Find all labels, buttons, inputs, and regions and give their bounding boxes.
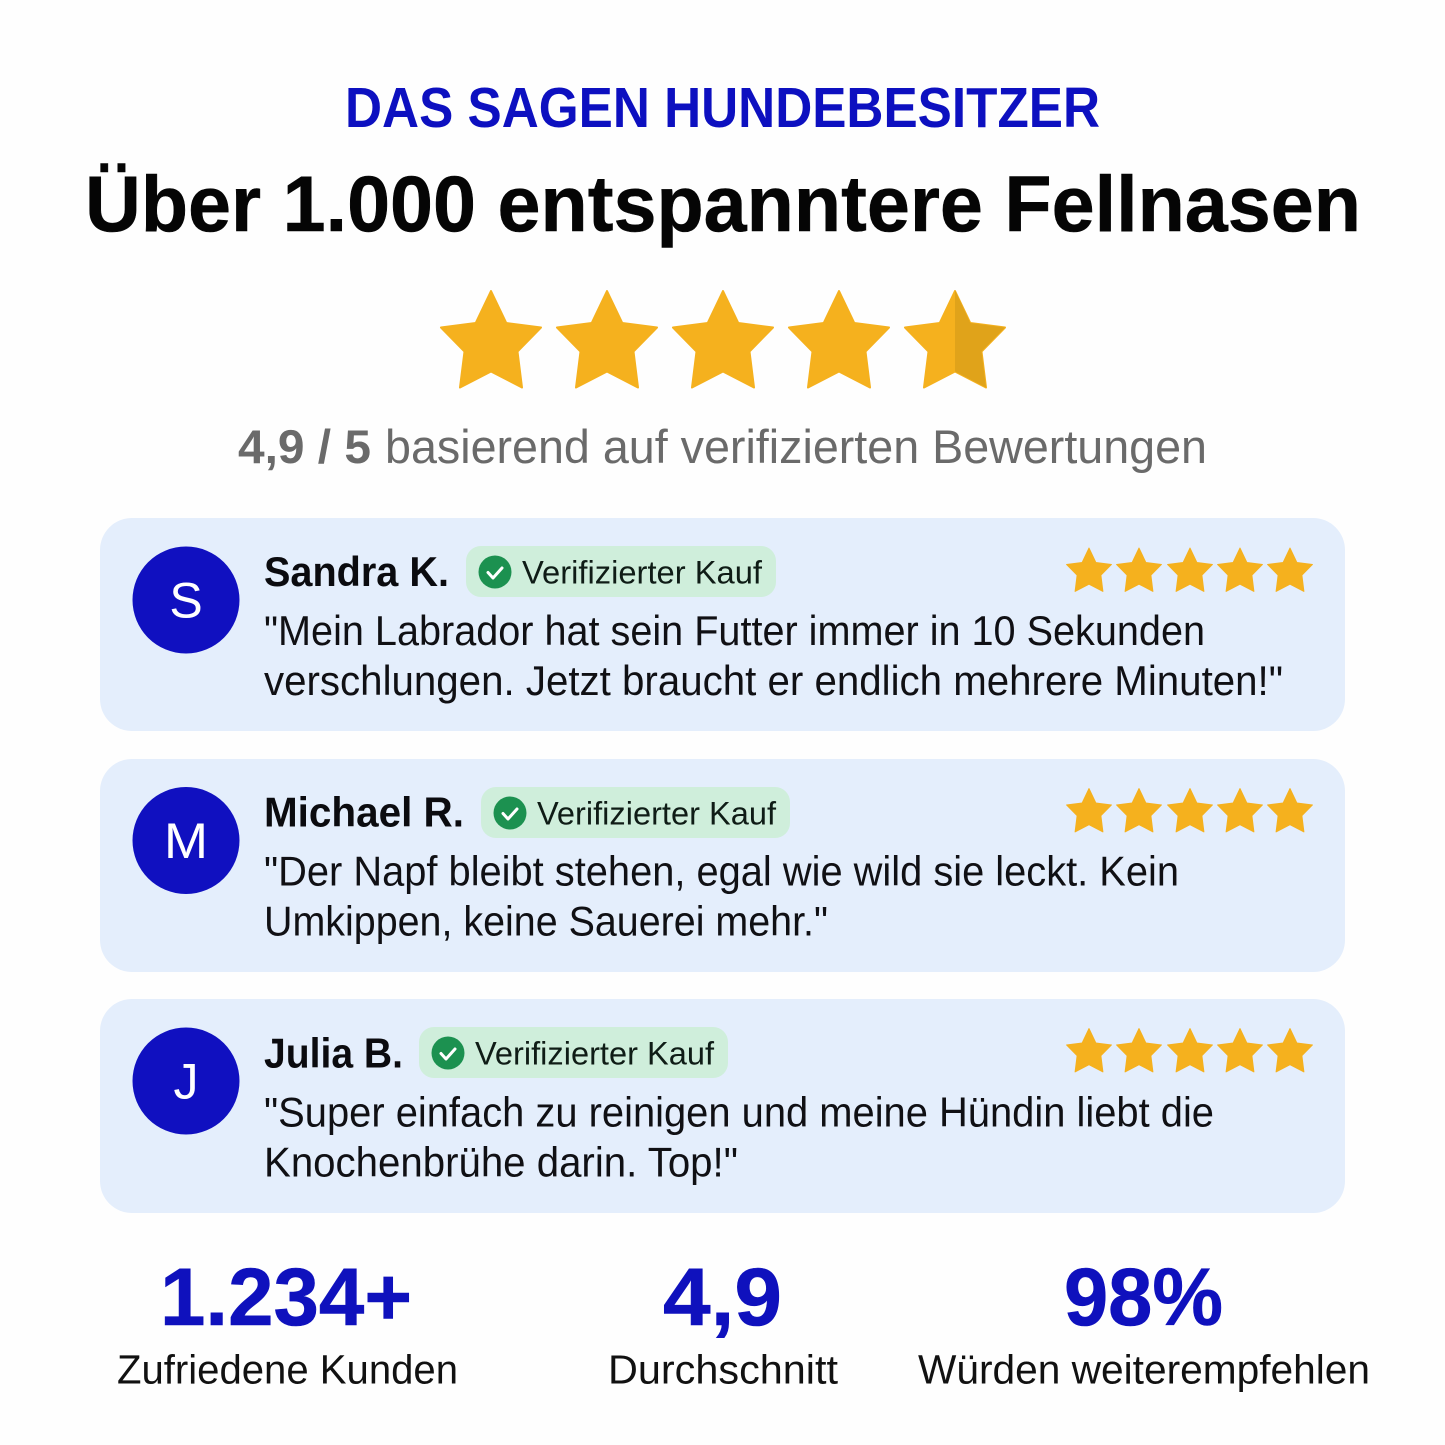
- quote: "Der Napf bleibt stehen, egal wie wild sie leckt. Kein: [264, 848, 1179, 894]
- reviewer name: Michael R.: [264, 788, 464, 836]
- verified badge: Verifizierter Kauf: [522, 554, 762, 590]
- stat: average: 4,9: [663, 1252, 782, 1343]
- stat: customers: 1.234+: [160, 1252, 412, 1343]
- quote: Knochenbrühe darin. Top!": [264, 1138, 738, 1186]
- five stars: [1066, 788, 1312, 832]
- stat: customers: [117, 1252, 458, 1392]
- avatar J: [132, 1028, 240, 1134]
- verified badge: [481, 787, 790, 838]
- avatar S: S: [169, 572, 203, 628]
- panel: review Michael R.: [100, 759, 1345, 972]
- avatar M: [132, 787, 240, 894]
- reviewer name: Julia B.: [264, 1030, 403, 1076]
- reviewer name: Sandra K.: [264, 548, 449, 595]
- avatar M: M: [164, 813, 208, 869]
- rating stars: [441, 290, 1005, 388]
- eyebrow heading: DAS SAGEN HUNDEBESITZER: [345, 76, 1100, 140]
- stat: recommend: [918, 1252, 1370, 1392]
- quote: [264, 848, 1179, 944]
- quote: [264, 607, 1283, 704]
- five stars: [1066, 1028, 1312, 1072]
- panel: review Julia B.: [100, 999, 1345, 1213]
- panel: review Sandra K.: [100, 518, 1345, 731]
- stat: average: [608, 1252, 839, 1392]
- quote: "Super einfach zu reinigen und meine Hündin liebt die: [264, 1088, 1214, 1136]
- verified badge: Verifizierter Kauf: [475, 1036, 714, 1072]
- quote: [264, 1088, 1214, 1186]
- rating summary: basierend auf verifizierten Bewertungen: [385, 420, 1207, 473]
- quote: Umkippen, keine Sauerei mehr.": [264, 898, 828, 944]
- quote: verschlungen. Jetzt braucht er endlich mehrere Minuten!": [264, 657, 1283, 704]
- stat: customers: Zufriedene Kunden: [117, 1346, 458, 1392]
- avatar S: [132, 546, 240, 654]
- stat: recommend: 98%: [1064, 1252, 1223, 1343]
- verified badge: [419, 1027, 728, 1078]
- verified badge: [466, 546, 776, 597]
- rating summary: 4,9 / 5: [238, 420, 371, 473]
- stat: average: Durchschnitt: [608, 1346, 839, 1392]
- five stars: [1066, 548, 1312, 591]
- quote: "Mein Labrador hat sein Futter immer in 10 Sekunden: [264, 607, 1205, 654]
- verified badge: Verifizierter Kauf: [537, 796, 776, 832]
- avatar J: J: [174, 1054, 198, 1110]
- stat: recommend: Würden weiterempfehlen: [918, 1346, 1370, 1392]
- title: Über 1.000 entspanntere Fellnasen: [85, 159, 1361, 248]
